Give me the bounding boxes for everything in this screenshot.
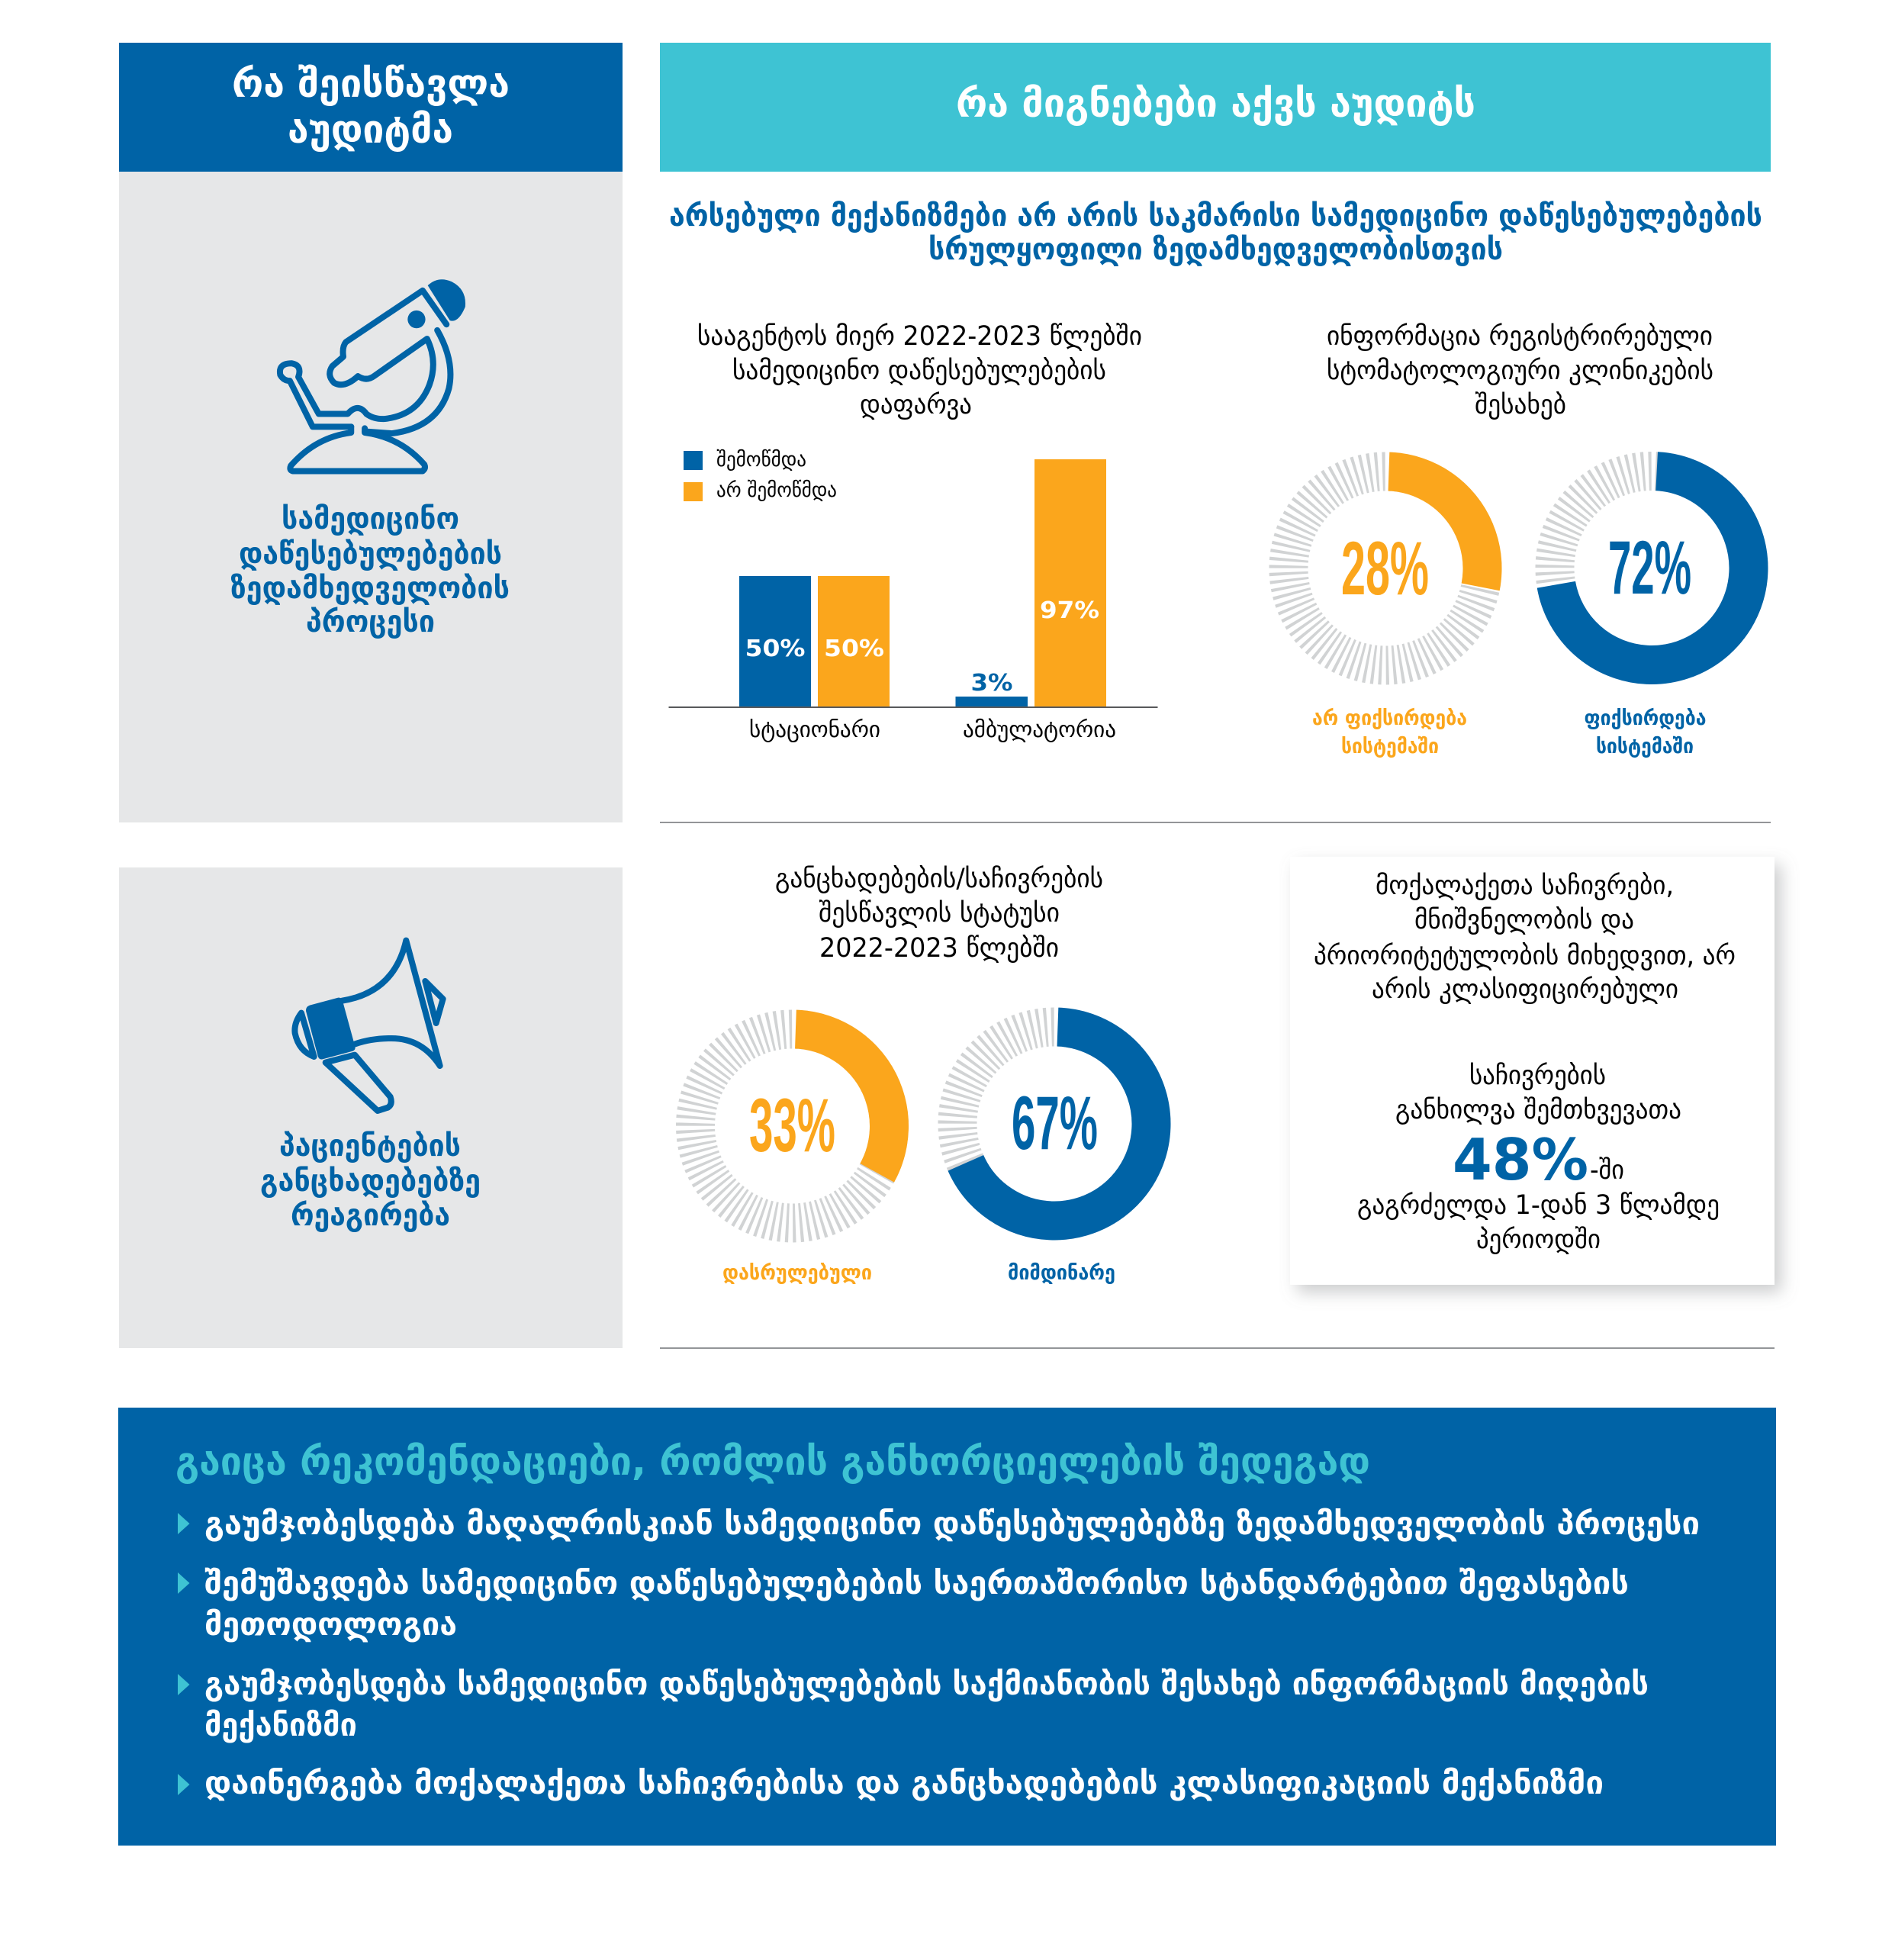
- subheading: mechanisms insufficient: არსებული მექანიზმები არ არის საკმარისი სამედიცინო დაწესებულებების: [669, 199, 1762, 233]
- bar: outpatient unchecked 97%: 97%: [1040, 597, 1099, 624]
- label: recorded in system: ფიქსირდება: [1584, 706, 1706, 730]
- recommendation 3: მექანიზმი: [204, 1707, 357, 1743]
- legend: [684, 449, 837, 502]
- bar: inpatient checked 50%: [739, 576, 811, 707]
- label: ongoing: მიმდინარე: [1008, 1261, 1115, 1285]
- chart title: dental clinic information: შესახებ: [1475, 390, 1566, 420]
- chart title: dental clinic information: სტომატოლოგიური კლინიკების: [1327, 356, 1713, 386]
- text: complaints not classified: არის კლასიფიცირებული: [1372, 974, 1678, 1005]
- heading: what the audit studied: რა შეისწავლა: [232, 62, 510, 107]
- donut chart: 28%: 28%: [1341, 526, 1429, 610]
- bar chart: coverage: [668, 459, 1158, 742]
- donut chart: 67%: 67%: [1012, 1080, 1098, 1165]
- subheading: mechanisms insufficient: [669, 199, 1762, 267]
- text: oversight process label: დაწესებულებების: [239, 537, 502, 571]
- callout card: complaints: [1290, 857, 1775, 1285]
- category labels: ამბულატორია: [963, 716, 1116, 742]
- donut chart: 72%: [1550, 466, 1753, 670]
- text: complaints response label: [260, 1129, 481, 1233]
- bar: outpatient checked 3%: 3%: [970, 670, 1013, 697]
- text: complaints not classified: მოქალაქეთა საჩივრები,: [1376, 871, 1674, 901]
- panel: left column header: [119, 43, 623, 172]
- text: complaints not classified: [1314, 871, 1736, 1005]
- chart title: dental clinic information: [1327, 321, 1713, 420]
- chart title: complaint review status: განცხადებების/საჩივრების: [775, 864, 1103, 894]
- bar: inpatient checked 50%: 50%: [745, 636, 806, 662]
- category labels: სტაციონარი: [749, 716, 880, 742]
- bar: inpatient unchecked 50%: 50%: [824, 636, 884, 662]
- text: complaints not classified: მნიშვნელობის და: [1414, 905, 1634, 935]
- text: complaint review duration: 48%: [1453, 1126, 1588, 1193]
- text: complaints response label: პაციენტების: [279, 1129, 461, 1163]
- text: oversight process label: პროცესი: [306, 605, 435, 639]
- text: complaint review duration: გაგრძელდა 1-დან 3 წლამდე: [1357, 1190, 1720, 1221]
- panel: right column header: [660, 43, 1771, 172]
- heading: audit findings: რა მიგნებები აქვს აუდიტს: [956, 82, 1475, 127]
- label: not recorded in system: არ ფიქსირდება: [1312, 706, 1467, 730]
- subheading: mechanisms insufficient: სრულყოფილი ზედამხედველობისთვის: [928, 233, 1503, 267]
- category labels: [749, 716, 1116, 742]
- heading: what the audit studied: აუდიტმა: [288, 108, 453, 153]
- chart title: facility coverage: სააგენტოს მიერ 2022-2023 წლებში: [697, 321, 1142, 352]
- chart title: facility coverage: დაფარვა: [860, 390, 972, 420]
- recommendation 3: [178, 1666, 1649, 1743]
- text: complaint review duration: [1357, 1060, 1720, 1255]
- text: complaint review duration: განხილვა შემთხვევათა: [1395, 1095, 1681, 1125]
- donut chart: 28%: [1285, 468, 1485, 668]
- label: not recorded in system: სისტემაში: [1341, 735, 1439, 758]
- donut chart: 33%: 33%: [749, 1083, 835, 1167]
- legend: არ შემოწმდა: [716, 479, 837, 502]
- panel: medical facility oversight: [119, 172, 623, 822]
- panel: recommendations: [118, 1408, 1776, 1846]
- chart title: dental clinic information: ინფორმაცია რეგისტრირებული: [1327, 321, 1713, 352]
- recommendation 4: დაინერგება მოქალაქეთა საჩივრებისა და განცხადებების კლასიფიკაციის მექანიზმი: [204, 1765, 1604, 1801]
- donut chart: 33%: [692, 1026, 893, 1226]
- recommendation 2: შემუშავდება სამედიცინო დაწესებულებების საერთაშორისო სტანდარტებით შეფასების: [204, 1565, 1629, 1601]
- recommendation 3: გაუმჯობესდება სამედიცინო დაწესებულებების საქმიანობის შესახებ ინფორმაციის მიღების: [204, 1666, 1649, 1702]
- bar: inpatient unchecked 50%: [818, 576, 890, 707]
- legend: შემოწმდა: [716, 449, 806, 471]
- label: not recorded in system: [1312, 706, 1467, 758]
- text: oversight process label: სამედიცინო: [282, 502, 459, 536]
- chart title: complaint review status: [775, 864, 1103, 964]
- chart title: facility coverage: სამედიცინო დაწესებულებების: [732, 356, 1106, 386]
- text: oversight process label: ზედამხედველობის: [230, 571, 510, 606]
- chart title: complaint review status: 2022-2023 წლებში: [819, 933, 1059, 964]
- text: complaints not classified: პრიორიტეტულობის მიხედვით, არ: [1314, 941, 1736, 971]
- label: recorded in system: სისტემაში: [1596, 735, 1694, 758]
- text: oversight process label: [230, 502, 510, 639]
- chart title: facility coverage: [697, 321, 1142, 420]
- text: complaint review duration: პერიოდში: [1476, 1225, 1601, 1255]
- panel: patient complaints response: [119, 867, 623, 1348]
- label: completed: დასრულებული: [722, 1261, 872, 1285]
- icon: microscope: [280, 279, 465, 471]
- bar: outpatient unchecked 97%: [1034, 459, 1106, 707]
- recommendation 1: გაუმჯობესდება მაღალრისკიან სამედიცინო დაწესებულებებზე ზედამხედველობის პროცესი: [204, 1505, 1700, 1542]
- text: complaint review duration: -ში: [1590, 1155, 1624, 1186]
- heading: what the audit studied: [232, 62, 510, 153]
- chart title: complaint review status: შესწავლის სტატუსი: [819, 898, 1060, 929]
- donut chart: 67%: [954, 1024, 1154, 1224]
- icon: megaphone: [294, 941, 443, 1111]
- text: complaint review duration: საჩივრების: [1469, 1060, 1606, 1091]
- heading: recommendations: გაიცა რეკომენდაციები, რომლის განხორციელების შედეგად: [175, 1440, 1370, 1485]
- text: complaints response label: განცხადებებზე: [260, 1164, 481, 1199]
- bar: outpatient checked 3%: [955, 670, 1028, 707]
- text: complaints response label: რეაგირება: [291, 1199, 450, 1233]
- recommendation 2: [178, 1565, 1629, 1643]
- donut chart: 72%: 72%: [1608, 525, 1691, 610]
- recommendation 2: მეთოდოლოგია: [204, 1606, 457, 1643]
- label: recorded in system: [1584, 706, 1706, 758]
